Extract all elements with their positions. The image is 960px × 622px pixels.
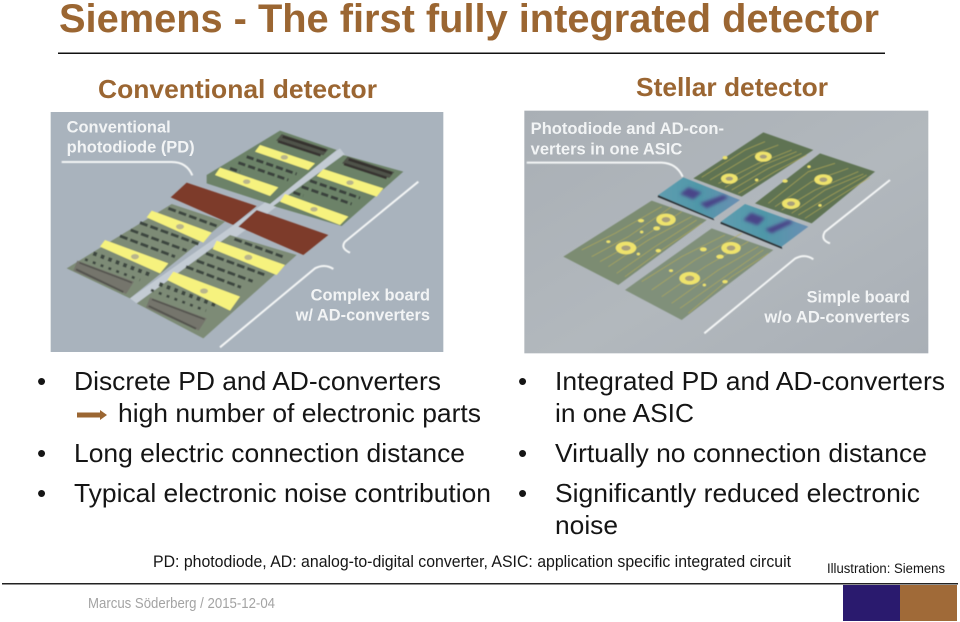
- text block: stellar detector bullets: Integrated PD and AD-converters: [555, 366, 945, 396]
- text block: stellar detector bullets: noise: [555, 510, 618, 540]
- label: simple board: w/o AD-converters: [763, 308, 910, 327]
- text block: stellar detector bullets: Significantly reduced electronic: [555, 478, 920, 508]
- white callout strokes: [62, 162, 418, 347]
- ASIC chips: [658, 195, 714, 220]
- heading: conventional detector: Conventional detector: [98, 74, 377, 104]
- stripe dots: [131, 155, 354, 294]
- label: photodiode and AD-converters: Photodiode and AD-con-: [531, 119, 724, 138]
- traces: [582, 142, 870, 313]
- text block: conventional detector bullets: •: [37, 478, 46, 508]
- light gaps between boards: [130, 148, 345, 303]
- label: conventional photodiode: Conventional: [67, 118, 171, 137]
- panel: conventional photodiode board illustration: [51, 112, 443, 352]
- author and date: Marcus Söderberg / 2015-12-04: [88, 595, 275, 612]
- text block: conventional detector bullets: Discrete PD and AD-converters: [74, 366, 441, 396]
- label: photodiode and AD-converters: verters in one ASIC: [531, 139, 682, 158]
- footer colour blocks: [843, 585, 957, 621]
- abbreviations note: PD: photodiode, AD: analog-to-digital converter, ASIC: application specific integrated circuit: [153, 553, 791, 571]
- boards: [693, 132, 813, 197]
- yellow stripes: [100, 145, 383, 311]
- label: conventional photodiode: photodiode (PD): [67, 138, 195, 157]
- text block: stellar detector bullets: •: [518, 438, 527, 468]
- text block: stellar detector bullets: Virtually no connection distance: [555, 438, 927, 468]
- pads: [606, 152, 832, 286]
- label: complex board: [295, 286, 430, 325]
- label: complex board: Complex board: [311, 286, 430, 305]
- text block: stellar detector bullets: •: [518, 366, 527, 396]
- text block: conventional detector bullets: high number of electronic parts: [118, 398, 481, 428]
- dark purple cross on chips: [680, 187, 793, 233]
- boards: [207, 131, 337, 204]
- label: conventional photodiode: [67, 118, 195, 157]
- label: simple board: Simple board: [807, 288, 910, 307]
- label: complex board: w/ AD-converters: [295, 306, 430, 325]
- panel: stellar detector board illustration: [524, 111, 928, 353]
- text block: stellar detector bullets: in one ASIC: [555, 398, 694, 428]
- text block: conventional detector bullets: [37, 366, 491, 508]
- components: [230, 157, 297, 180]
- text block: stellar detector bullets: [518, 366, 945, 540]
- text block: stellar detector bullets: •: [518, 478, 527, 508]
- arrow: [77, 410, 107, 420]
- white callout strokes: [527, 163, 890, 333]
- brown photodiodes: [171, 183, 257, 225]
- text block: conventional detector bullets: Long electric connection distance: [74, 438, 465, 468]
- heading: stellar detector: Stellar detector: [636, 72, 828, 102]
- illustration credit: Illustration: Siemens: [827, 561, 945, 576]
- connectors: [276, 134, 328, 155]
- label: photodiode and AD-converters: [531, 119, 724, 158]
- text block: conventional detector bullets: •: [37, 438, 46, 468]
- text block: conventional detector bullets: Typical electronic noise contribution: [74, 478, 491, 508]
- label: simple board: [763, 288, 910, 327]
- text block: conventional detector bullets: •: [37, 366, 46, 396]
